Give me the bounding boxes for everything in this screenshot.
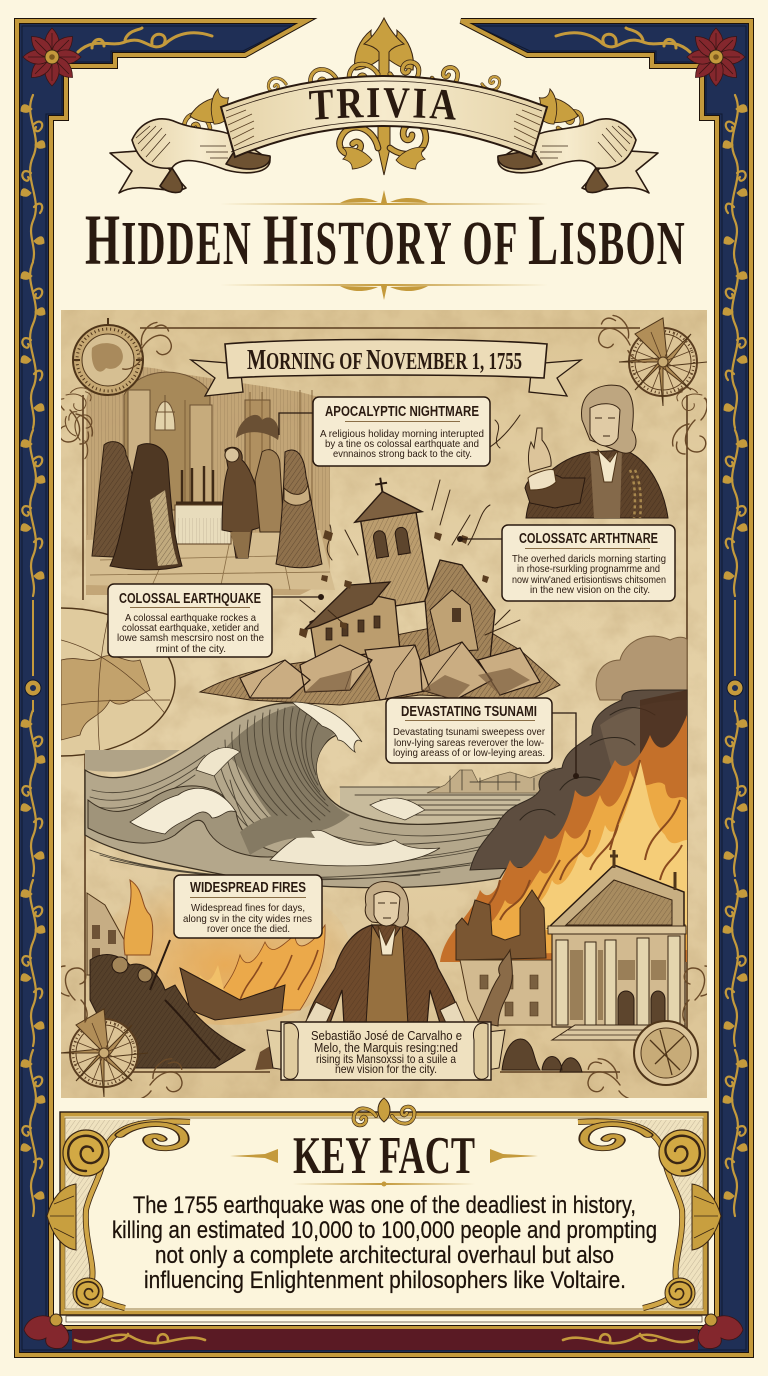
- scene: left fire, rubble and survivors: [87, 875, 350, 1070]
- leaning bell tower: [353, 478, 429, 606]
- callout: Colossatc Arthtnare: in the new vision on the city.: [530, 584, 650, 596]
- distant city: [427, 768, 560, 793]
- caption scroll: Sebastião José de Carvalho e Melo: rising its Mansoxssi to a suile a: [316, 1052, 456, 1066]
- corner scrollwork, top bands: [78, 28, 690, 52]
- icon: compass rose bottom left: [60, 1009, 148, 1097]
- divider above title: [220, 190, 548, 205]
- towers in fire: [456, 890, 546, 960]
- callout: Apocalyptic Nightmare: A religious holiday morning interupted: [320, 428, 484, 440]
- divider below title: [220, 284, 548, 300]
- left building: [87, 893, 127, 975]
- floor: [86, 530, 335, 590]
- panel: key fact: [47, 1098, 721, 1315]
- heading flourish left: [230, 1149, 278, 1163]
- title: Hidden History of Lisbon: HIDDEN HISTORY OF LISBON: [85, 200, 686, 280]
- temple columns: [556, 936, 680, 1025]
- filigree lower corners: [53, 966, 717, 1101]
- key fact paragraph: killing an estimated 10,000 to 100,000 people and prompting: [112, 1217, 657, 1244]
- callout: Colossal Earthquake: A colossal earthquake rockes a: [125, 612, 256, 624]
- heading ribbon: Morning of November 1, 1755: MORNING OF NOVEMBER 1, 1755: [247, 344, 522, 376]
- callout: Devastating Tsunami: loying areass of or low-leying areas.: [393, 747, 545, 759]
- callout: Colossatc Arthtnare: COLOSSATC ARTHTNARE: [519, 531, 658, 547]
- icon: medallion bottom right: [634, 1021, 698, 1085]
- callout: Colossal Earthquake: [108, 584, 324, 657]
- altar: [175, 505, 231, 544]
- trivia banner: [109, 17, 659, 194]
- figures: onlookers lower right: [502, 1039, 582, 1072]
- icon: compass rose top right: [619, 318, 707, 406]
- icon: globe medallion top left: [73, 318, 143, 395]
- crest on top of box: [354, 1098, 414, 1125]
- survivors: [90, 955, 245, 1068]
- temple facade: [552, 925, 685, 1027]
- maroon bottom band: [72, 1329, 698, 1350]
- key fact paragraph: The 1755 earthquake was one of the deadliest in history,: [133, 1192, 636, 1219]
- callout: Devastating Tsunami: lonv-lying sareas reverover the low-: [394, 737, 544, 749]
- callout: Colossatc Arthtnare: now wirw'aned ertisiontisws chitsomen: [512, 574, 666, 586]
- rocks: [240, 642, 540, 700]
- callout: Devastating Tsunami: Devastating tsunami sweepess over: [393, 726, 545, 738]
- burnt tree: [478, 950, 512, 1026]
- callout: Widespread Fires: WIDESPREAD FIRES: [190, 880, 306, 896]
- figure: man in coat: [222, 446, 260, 558]
- debris and cracks: [300, 480, 520, 635]
- scene: portrait with raised hand: [490, 385, 668, 518]
- callout: Colossal Earthquake: rmint of the city.: [156, 643, 226, 655]
- caption scroll: Sebastião José de Carvalho e Melo: Sebastião José de Carvalho e: [311, 1028, 462, 1043]
- gold scrolls on bottom band: [75, 1334, 693, 1343]
- rubble beams: [180, 968, 285, 1020]
- hatching on banner tails: [136, 126, 632, 162]
- chandelier / statue: [236, 415, 279, 440]
- corner filigree top right: [598, 314, 707, 455]
- callout: Devastating Tsunami: DEVASTATING TSUNAMI: [401, 704, 537, 720]
- figure: Marquis of Pombal, centre: [305, 882, 465, 1025]
- caption scroll: Sebastião José de Carvalho e Melo: Melo, the Marquis resing:ned: [314, 1040, 458, 1055]
- callout: Devastating Tsunami: [386, 698, 579, 779]
- figure: monk left: [91, 441, 132, 558]
- heading: TRIVIA: TRIVIA: [308, 88, 456, 120]
- scene: black smoke and right-hand fire: [440, 690, 687, 962]
- callout: Apocalyptic Nightmare: evnnainos strong back to the city.: [333, 448, 472, 460]
- map globe at left edge: [61, 607, 176, 757]
- rule under heading: [293, 1182, 475, 1186]
- cuffs and hands: [305, 1002, 465, 1023]
- key fact paragraph: influencing Enlightenment philosophers like Voltaire.: [144, 1267, 626, 1294]
- key fact paragraph: not only a complete architectural overhaul but also: [155, 1242, 614, 1269]
- caption scroll: Sebastião José de Carvalho e Melo: [267, 1022, 505, 1080]
- callout: Colossal Earthquake: colossat earthquake, xetider and: [122, 622, 259, 634]
- figure: monk centre: [110, 444, 182, 570]
- panel: illustrated timeline: [61, 310, 707, 1098]
- cream strip under key fact: [66, 1316, 702, 1322]
- banner tails: [110, 119, 658, 193]
- callout: Widespread Fires: [174, 875, 322, 938]
- callout: Widespread Fires: rover once the died.: [207, 923, 290, 935]
- hatching on banner ends: [226, 110, 542, 146]
- heading flourish right: [490, 1149, 538, 1163]
- icon: red corner flowers, bottom: [24, 1314, 743, 1349]
- callout: Colossatc Arthtnare: The overhed daricls morning starting: [512, 553, 666, 565]
- portrait head: [582, 385, 636, 453]
- wave lines: [214, 708, 330, 827]
- temple steps: [552, 1025, 660, 1040]
- figure: women: [255, 450, 284, 532]
- callout: Colossal Earthquake: COLOSSAL EARTHQUAKE: [119, 591, 261, 607]
- vine ornaments in side bands: [21, 95, 747, 1216]
- raised hand: [528, 428, 551, 472]
- foam crest: [292, 702, 362, 752]
- icon: red corner flowers, top: [23, 28, 745, 86]
- callout: Apocalyptic Nightmare: by a tine os colossal earthquate and: [325, 438, 479, 450]
- callout: Apocalyptic Nightmare: [279, 397, 490, 466]
- heading: KEY FACT: KEY FACT: [293, 1127, 475, 1185]
- scene: church interior: [86, 367, 335, 595]
- wave body: [85, 703, 525, 888]
- scene: burning city and neoclassical building: [456, 850, 686, 1040]
- curl shadow: [222, 706, 350, 832]
- callout: Widespread Fires: Widespread fines for days,: [191, 902, 305, 914]
- heading ribbon: Morning of November 1, 1755: [191, 340, 581, 396]
- collapsed buildings: [310, 595, 400, 660]
- callout: Widespread Fires: along sv in the city wides rnes: [183, 913, 312, 925]
- head and wig: [365, 882, 408, 927]
- scene: collapsing church and rubble: [200, 472, 560, 705]
- banner main ribbon: [221, 76, 547, 157]
- ornate side cartouche left: [47, 1120, 190, 1308]
- key fact paragraph: [112, 1192, 657, 1294]
- left wing: [460, 960, 552, 1025]
- scene: tsunami wave: [85, 702, 560, 888]
- gold crest above banner: [182, 18, 585, 138]
- second crest: [88, 786, 290, 857]
- inner frame line: [83, 328, 687, 1072]
- gold crest below banner: [336, 120, 431, 175]
- corner filigree top left: [61, 322, 172, 460]
- scene: smoke cloud beside rubble: [596, 636, 687, 700]
- ornate side cartouche right: [578, 1120, 721, 1308]
- callout: Colossal Earthquake: lowe samsh mescrsiro nost on the: [117, 632, 264, 644]
- distant sea: [85, 750, 180, 772]
- callout: Apocalyptic Nightmare: APOCALYPTIC NIGHTMARE: [325, 404, 479, 420]
- callout: Colossatc Arthtnare: [457, 525, 675, 601]
- rubble mound: [200, 620, 560, 705]
- callout: Colossatc Arthtnare: in rhose-rsurkling prognamrme and: [517, 563, 660, 575]
- caption scroll: Sebastião José de Carvalho e Melo: new vision for the city.: [335, 1062, 437, 1076]
